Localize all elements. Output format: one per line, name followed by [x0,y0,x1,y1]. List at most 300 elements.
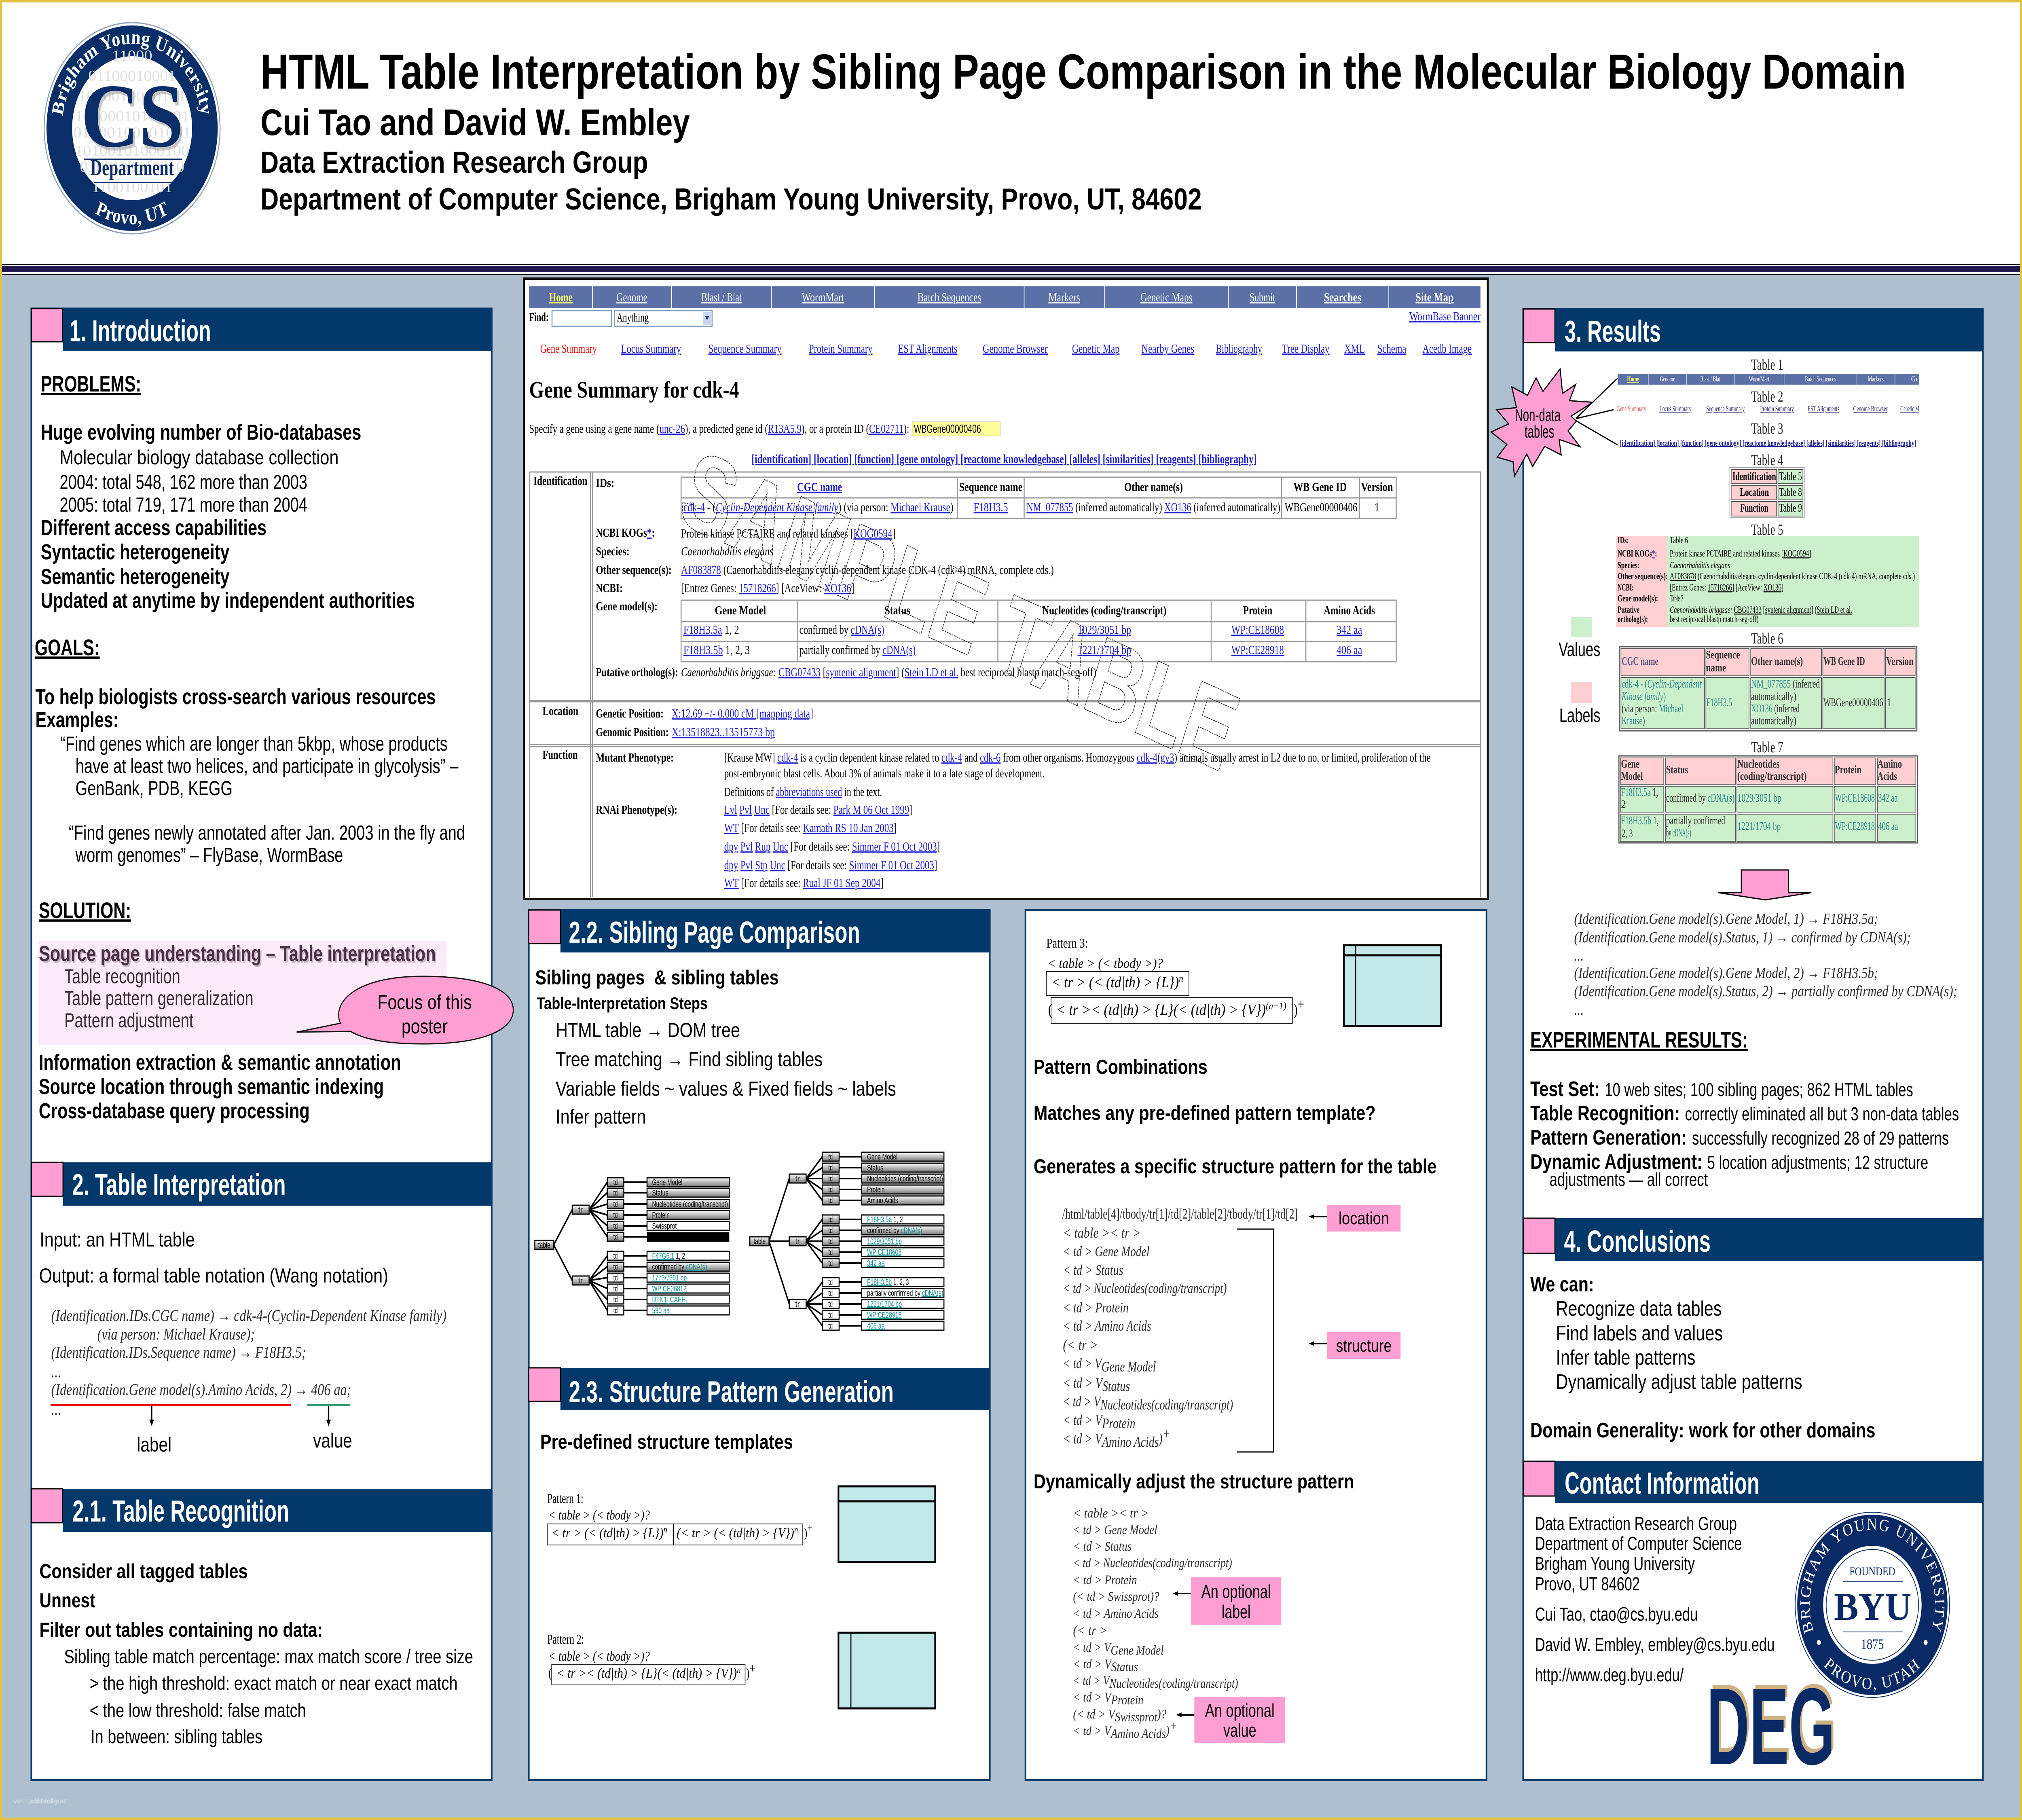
text block: table recognition: < the low threshold: false match [90,1700,306,1721]
structure pattern listing: < td > V [1063,1393,1105,1410]
text block: input and output: Output: a formal table notation (Wang notation) [39,1264,388,1287]
results: table 5: Table 5 [1751,521,1783,538]
pattern 3 [1047,935,1304,1024]
annotation: label and value arrows: value [313,1429,352,1452]
navigation bar: Searches [1324,291,1361,305]
results: table 5: Caenorhabditis briggsae: CBG07433 [syntenic alignment] (Stein LD et al. [1670,604,1852,615]
results: table 6: Other name(s) [1751,654,1803,668]
find controls: Find: [529,311,549,324]
identification row: AF083878 (Caenorhabditis elegans cyclin-dependent kinase CDK-4 (cdk-4) mRNA, complete cds.) [681,563,1054,577]
heading: 3. Results: 3. Results [1565,315,1661,348]
results: table 6: 1 [1887,696,1891,709]
structure pattern listing: Protein [1102,1415,1136,1432]
tab links: Gene Summary [540,342,597,356]
results: table 4: Table 4 [1751,451,1783,469]
gene model table: Nucleotides (coding/transcript) [1043,604,1166,618]
diagram: DOM tree of second sibling table: 406 aa [867,1321,885,1330]
results: table 5: Table 7 [1670,593,1684,603]
text block: contact details: Cui Tao, ctao@cs.byu.edu [1535,1604,1698,1625]
results: table 6: CGC name [1622,654,1658,668]
results: table 4: Table 5 [1779,470,1802,483]
heading: 2.3 Structure Pattern Generation [529,1368,990,1410]
diagram: DOM tree of second sibling table: td [828,1278,833,1287]
diagram: DOM tree of first sibling table: 1773/7391 bp [652,1273,687,1282]
pattern 1: n [663,1525,667,1534]
diagram: DOM tree of second sibling table: partially confirmed by cDNA(s) [867,1289,943,1297]
heading: Contact Information [1523,1461,1983,1503]
diagram: DOM tree of second sibling table: Protein [867,1185,885,1194]
text block: conclusions: Domain Generality: work for other domains [1530,1419,1876,1442]
results: table 7: by cDNA(s) [1666,826,1691,839]
results: table 2: Gene Summary [1617,404,1646,413]
results: table 6: cdk-4 - (Cyclin-Dependent [1622,677,1702,690]
callout: optional value: An optional [1205,1700,1275,1721]
function row: Function [543,748,577,762]
results: table 2: Table 2 [1751,388,1783,405]
results: table 4: Table 9 [1779,502,1802,514]
header band [0,0,2022,275]
results: table 7: 342 aa [1878,791,1898,804]
text block: experimental results: EXPERIMENTAL RESULTS: [1530,1027,1748,1052]
IDs table: Version [1361,480,1393,494]
diagram: DOM tree of first sibling table: Nucleotides (coding/transcript) [652,1200,728,1208]
text block: pattern combinations [1034,1055,1437,1178]
heading: 2. Table Interpretation: 2. Table Interpretation [72,1168,286,1202]
text block: conclusions: Recognize data tables [1556,1297,1722,1321]
structure pattern listing: < td > V [1063,1412,1105,1428]
gene model table: confirmed by cDNA(s) [799,623,884,637]
logo: BYU CS department seal: 01100010001 [88,67,176,85]
results: table 5: AF083878 (Caenorhabditis elegans cyclin-dependent kinase CDK-4 (cdk-4) mRNA, complete cds.) [1670,571,1915,581]
formula: results notation: (Identification.Gene model(s).Gene Model, 1) → F18H3.5a; [1574,910,1878,927]
text block: sibling pages: Table-Interpretation Steps [537,994,708,1013]
structure pattern listing: Nucleotides(coding/transcript) [1100,1397,1233,1413]
results: table 5: [Entrez Genes: 15718266] [AceView: XO136] [1670,582,1783,593]
results: table 1: Genome [1660,375,1675,383]
identification row: Caenorhabditis briggsae: CBG07433 [syntenic alignment] (Stein LD et al. best reciprocal blastp match-seg-off) [681,666,1096,679]
diagram: DOM tree of first sibling table: Swissprot [652,1221,677,1230]
navigation bar: Home [549,291,573,305]
text block: solution [38,897,446,1123]
highlight: source page understanding: Table recognition [64,965,180,988]
diagram: DOM tree of second sibling table: td [828,1299,833,1308]
location row: Location [543,705,578,718]
diagram: DOM tree of second sibling table: Status [867,1163,883,1172]
results: table 5: Other sequence(s): [1618,571,1668,581]
adjusted structure pattern listing: < td > Status [1073,1539,1132,1554]
diagram: DOM tree of second sibling table: td [828,1215,833,1224]
diagram: DOM tree of second sibling table: Gene Model [867,1152,897,1161]
text block: input and output [39,1228,388,1287]
results: table 7: F18H3.5b 1, [1621,814,1659,827]
text block: problems: Updated at anytime by independent authorities [41,588,415,613]
heading: 2.1 Table Recognition: 2.1. Table Recognition [72,1494,289,1528]
diagram: DOM tree of second sibling table: td [828,1310,833,1319]
affiliation: Department of Computer Science, Brigham Young University, Provo, UT, 84602 [260,182,1202,216]
callout: location [1309,1205,1400,1232]
callout: structure [1309,1332,1400,1359]
heading: 4. Conclusions [1523,1218,1983,1261]
gene model table: WP:CE28918 [1231,643,1284,657]
text block: pattern combinations: Matches any pre-defined pattern template? [1034,1101,1376,1124]
structure pattern listing: (< tr > [1063,1337,1098,1353]
gene model table: Gene Model [715,604,766,618]
function row: WT [For details see: Kamath RS 10 Jan 2003] [724,821,897,835]
callout: non-data tables starburst [1491,369,1618,476]
navigation bar [529,286,1481,308]
identification row: Putative ortholog(s): [596,666,678,679]
adjusted structure pattern listing: ) [1165,1723,1170,1738]
results: table 7 [1619,739,1918,843]
results: table 7: WP:CE18608 [1835,791,1875,804]
text block: solution: SOLUTION: [39,897,131,923]
pattern 3: < tr >< (td|th) > {L}(< (td|th) > {V}) [1056,1001,1250,1018]
diagram: DOM tree of first sibling table: tr [578,1276,583,1285]
diagram: DOM tree of second sibling table: Amino Acids [867,1196,898,1205]
pattern 1: < table > (< tbody >)? [548,1507,650,1523]
location row: Genomic Position: [596,726,668,739]
diagram: DOM tree of second sibling table: td [828,1174,833,1183]
pattern 2: ) [746,1666,750,1681]
navigation bar: Markers [1048,291,1080,305]
results: table 7: 2 [1621,798,1626,811]
logo: BYU CS department seal: 10100101000100 [75,142,189,159]
adjusted structure pattern listing: < td > Protein [1073,1572,1137,1587]
annotation: label and value arrows [51,1404,352,1456]
panel: results, conclusions and contact [1523,309,1983,1788]
highlight: source page understanding: Table pattern generalization [64,986,254,1009]
text block: conclusions: Find labels and values [1556,1322,1723,1345]
results: table 5: Gene model(s): [1618,593,1658,603]
results: table 1: WormMart [1749,375,1770,383]
results: table 5: Species: [1618,560,1639,570]
identification row: Gene model(s): [596,600,658,614]
structure pattern listing: Status [1102,1378,1130,1395]
text block: goals: “Find genes newly annotated after Jan. 2003 in the fly and [69,821,465,844]
results: table 7: Nucleotides [1737,757,1780,770]
pattern 1: + [807,1520,812,1536]
formula: Wang notation example: (Identification.Gene model(s).Amino Acids, 2) → 406 aa; [51,1380,351,1399]
diagram: DOM tree of second sibling table: td [828,1185,833,1194]
gene model table: Protein [1243,604,1272,618]
subheading: dynamically adjust: Dynamically adjust the structure pattern [1034,1470,1354,1493]
logo: BYU CS department seal: 11000 [112,47,152,64]
pattern 1: (< tr > (< (td|th) > {V}) [677,1525,789,1541]
callout: non-data tables starburst: Non-data [1515,405,1561,425]
subheading: predefined templates: Pre-defined structure templates [540,1430,793,1453]
structure pattern listing: Gene Model [1102,1359,1156,1375]
logo: BYU CS department seal: 10100010100101 [75,108,189,125]
text block: problems: Huge evolving number of Bio-databases [41,420,361,444]
logo: BYU seal: FOUNDED [1849,1564,1895,1578]
identification row: NCBI: [596,582,623,595]
diagram: DOM tree of second sibling table: F18H3.5a 1, 2 [867,1215,903,1224]
panel: pattern combinations and dynamic adjustment [1026,910,1487,1780]
text block: table recognition: Consider all tagged tables [40,1560,248,1583]
legend: values and labels: Labels [1559,705,1601,726]
pattern 3: ( [1048,1001,1052,1018]
gene model table: Status [885,604,910,618]
callout: optional label [1173,1577,1281,1625]
tab links: Nearby Genes [1142,342,1194,356]
diagram: DOM tree of second sibling table: tr [795,1299,800,1308]
heading: 2.1 Table Recognition [32,1489,492,1532]
diagram: DOM tree of first sibling table: td [613,1273,618,1282]
text block: conclusions: Dynamically adjust table patterns [1556,1370,1802,1394]
results: table 6: (via person: Michael [1622,702,1683,715]
results: table 2 [1617,388,1919,413]
pattern 2: Pattern 2: [547,1632,584,1647]
text block: table recognition: > the high threshold: exact match or near exact match [90,1673,458,1694]
pattern 3: (n−1) [1266,1000,1286,1011]
text block: goals: “Find genes which are longer than 5kbp, whose products [60,732,448,755]
logo: BYU CS department seal: 1010010010101 [78,87,186,105]
results: table 1: Markers [1868,375,1884,383]
navigation bar: WormMart [802,291,844,305]
text block: table recognition [40,1560,473,1748]
bracket: structure extent [1237,1229,1273,1452]
results: table 5: Caenorhabditis elegans [1670,560,1730,570]
adjusted structure pattern listing [1073,1506,1238,1741]
results: table 7: Model [1621,769,1643,783]
adjusted structure pattern listing: < td > V [1073,1657,1112,1672]
function row: dpy Pvl Rup Unc [For details see: Simmer F 01 Oct 2003] [724,840,940,854]
results: table 6 [1619,630,1917,731]
authors: Cui Tao and David W. Embley [260,101,690,143]
location row [543,705,813,739]
find controls [529,310,1481,326]
diagram: DOM tree of second sibling table: confirmed by cDNA(s) [867,1226,922,1235]
formula: results notation: ... [1574,947,1584,964]
tab links: XML [1344,342,1365,356]
adjusted structure pattern listing: (< td > V [1073,1707,1115,1722]
results: table 7: F18H3.5a 1, [1621,785,1658,799]
heading: 2.2 Sibling Page Comparison [529,910,990,952]
heading: Contact Information: Contact Information [1565,1467,1760,1500]
diagram: DOM tree of first sibling table: td [613,1232,618,1241]
identification row: Protein kinase PCTAIRE and related kinases [KOG0594] [681,527,895,541]
text block: conclusions: We can: [1530,1273,1594,1296]
results: table 6: XO136 (inferred [1751,702,1800,715]
text block: contact details: http://www.deg.byu.edu/ [1535,1665,1684,1685]
table sketch: label column pattern [838,1633,935,1708]
diagram: DOM tree of first sibling table: F47G6.1 1, 2 [652,1251,685,1260]
results: table 5: Putative [1618,604,1639,615]
pattern 2: n [737,1666,741,1675]
gene model table: partially confirmed by cDNA(s) [799,643,916,657]
diagram: DOM tree of first sibling table: 590 aa [652,1306,670,1315]
pattern 2: + [749,1661,755,1676]
adjusted structure pattern listing: Amino Acids [1110,1726,1166,1741]
IDs table: CGC name [797,480,842,494]
identification row: Other sequence(s): [596,563,672,577]
gene model table: WP:CE18608 [1231,623,1284,637]
text block: experimental results [1530,1027,1959,1190]
results: table 7: confirmed by cDNA(s) [1666,791,1734,804]
results: table 6: Table 6 [1751,630,1783,647]
highlight: source page understanding: Pattern adjustment [64,1009,193,1032]
logo: DEG: DEG [1709,1661,1837,1784]
diagram: DOM tree of second sibling table: 342 aa [867,1259,885,1268]
function row: Mutant Phenotype: [596,751,674,765]
pattern 2: ( [548,1666,552,1681]
results: table 1: Table 1 [1751,356,1783,373]
gene model table: 1221/1704 bp [1078,643,1131,657]
text block: goals: To help biologists cross-search various resources [36,684,436,709]
text block: goals: have at least two helices, and participate in glycolysis” – [76,754,459,777]
text block: sibling pages: Variable fields ~ values & Fixed fields ~ labels [556,1077,896,1100]
results: table 7: partially confirmed [1666,814,1725,827]
diagram: DOM tree of second sibling table: F18H3.5b 1, 2, 3 [867,1278,909,1287]
tab links [540,342,1472,356]
logo: BYU CS department seal: 01000100101001 [73,124,191,141]
results: table 6: WBGene00000406 [1823,696,1883,709]
text block: contact details: Brigham Young University [1535,1553,1695,1574]
navigation bar: Genetic Maps [1140,291,1192,305]
text block: table recognition: Filter out tables containing no data: [40,1618,323,1641]
text block: problems: Molecular biology database collection [60,446,339,469]
formula: Wang notation example: (Identification.IDs.CGC name) → cdk-4-(Cyclin-Dependent Kinase family) [51,1306,446,1325]
text block: contact details [1535,1513,1775,1685]
callout: optional label: label [1222,1602,1251,1622]
diagram: DOM tree of second sibling table: td [828,1226,833,1235]
function row: RNAi Phenotype(s): [596,803,677,817]
results: table 7: 406 aa [1878,819,1898,833]
diagram: DOM tree of first sibling table: td [613,1200,618,1208]
diagram: DOM tree of first sibling table: DTN1_CAEEL [652,1295,689,1304]
text block: input and output: Input: an HTML table [40,1228,195,1251]
results: table 7: Protein [1835,763,1861,776]
IDs table: Other name(s) [1124,480,1183,494]
diagram: DOM tree of first sibling table: td [613,1251,618,1260]
find controls: WormBase Banner [1409,310,1481,324]
structure pattern listing: + [1163,1426,1170,1442]
heading: 4. Conclusions: 4. Conclusions [1564,1225,1711,1258]
structure pattern listing: < td > V [1063,1375,1105,1391]
heading: 2.2 Sibling Page Comparison: 2.2. Sibling Page Comparison [569,916,860,949]
adjusted structure pattern listing: < td > Gene Model [1073,1522,1157,1537]
pattern 2 [547,1632,755,1685]
results: table 5 [1616,521,1919,627]
callout: focus of this poster [296,976,513,1044]
tab links: Protein Summary [809,342,873,356]
logo: BYU seal: 1875 [1861,1636,1884,1653]
arrow: table to notation [1718,870,1811,900]
text block: pattern combinations: Generates a specific structure pattern for the table [1034,1155,1437,1178]
pattern 3: Pattern 3: [1047,935,1088,951]
logo: BYU seal: BYU [1834,1585,1912,1629]
callout: focus of this poster: poster [402,1015,448,1038]
structure pattern listing: < td > Gene Model [1063,1243,1150,1260]
callout: location: location [1339,1208,1389,1228]
results: table 7: WP:CE28918 [1835,819,1875,833]
results: table 7: Acids [1878,769,1897,783]
gene specification line: WBGene00000406 [914,422,981,436]
structure pattern listing: ) [1158,1431,1163,1447]
title: HTML Table Interpretation by Sibling Page Comparison in the Molecular Biology Domain [260,44,1906,99]
adjusted structure pattern listing: Gene Model [1110,1643,1164,1658]
results: table 1: Blast / Blat [1701,375,1720,383]
results: table 5: ortholog(s): [1618,614,1648,624]
panel: sample gene summary screenshot [524,279,1488,899]
logo: BYU seal: PROVO, UTAH [1821,1655,1923,1693]
screenshot heading: Gene Summary for cdk-4 [529,377,739,403]
function row: post-embryonic blast cells. About 3% of animals make it to a late stage of development. [724,767,1045,781]
location row: X:12.69 +/- 0.000 cM [mapping data] [672,707,813,721]
table sketch: header row pattern [838,1486,935,1562]
logo: BYU seal: BRIGHAM YOUNG UNIVERSITY [1798,1515,1947,1636]
results: table 2: Genome Browser [1853,404,1888,413]
results: table 2: Protein Summary [1760,404,1794,413]
title block [260,44,1906,216]
diagram: DOM tree of first sibling table: td [613,1188,618,1197]
structure pattern listing: < td > Amino Acids [1063,1318,1151,1334]
logo: BYU CS department seal: 0100100010010 [80,158,184,176]
tab links: Tree Display [1282,342,1330,356]
text block: contact details: Data Extraction Research Group [1535,1513,1737,1534]
results: table 4: Table 8 [1779,486,1802,499]
results: table 5: Protein kinase PCTAIRE and related kinases [KOG0594] [1670,548,1811,559]
results: table 3: [identification] [location] [function] [gene ontology] [reactome knowledgebase] [alleles] [similarities] [reagents] [bibliography] [1620,439,1916,447]
diagram: DOM tree of first sibling table: td [613,1295,618,1304]
text block: problems: 2004: total 548, 162 more than 2003 [60,470,307,493]
gene specification line: Specify a gene using a gene name (unc-26), a predicted gene id (R13A5.9), or a protein ID (CE02711): [529,422,909,436]
tab links: Genome Browser [983,342,1048,356]
text block: solution: Source location through semantic indexing [39,1074,384,1099]
heading: 3. Results [1523,309,1983,351]
diagram: DOM tree of second sibling table: WP:CE18608 [867,1248,901,1257]
IDs table: cdk-4 - (Cyclin-Dependent Kinase family) (via person: Michael Krause) [683,501,954,514]
text block: sibling pages: Infer pattern [556,1105,646,1128]
text block: problems: Different access capabilities [41,515,266,540]
identification row: Identification [533,474,588,488]
results: table 4: Identification [1732,470,1776,483]
footer credit: www.imagechristiancollege.com [13,1797,68,1805]
pattern 2: < tr >< (td|th) > {L}(< (td|th) > {V}) [556,1666,730,1681]
callout: structure: structure [1336,1335,1392,1356]
pattern 3: < tr > (< (td|th) > {L}) [1051,973,1172,991]
annotation: label and value arrows: label [137,1433,171,1456]
identification row: IDs: [596,476,614,490]
structure pattern listing: < td > Status [1063,1262,1123,1278]
results: table 6: Kinase family) [1621,690,1666,703]
diagram: DOM tree of first sibling table: td [613,1306,618,1315]
text block: solution: Cross-database query processing [39,1098,310,1123]
logo: BYU CS department seal: Department [90,155,174,180]
logo: BYU CS department seal [44,23,220,234]
structure pattern listing: < td > Protein [1063,1299,1129,1316]
adjusted structure pattern listing: < td > Nucleotides(coding/transcript) [1073,1555,1232,1570]
text block: problems: Syntactic heterogeneity [41,540,230,564]
formula: results notation: (Identification.Gene model(s).Gene Model, 2) → F18H3.5b; [1574,964,1878,982]
results: table 1 [1618,356,1919,385]
diagram: DOM tree of first sibling table: table [538,1240,550,1249]
adjusted structure pattern listing: Protein [1111,1693,1143,1708]
pattern 1: < tr > (< (td|th) > {L}) [551,1525,659,1541]
text block: problems: Semantic heterogeneity [41,564,230,589]
tab links: Genetic Map [1072,342,1119,356]
tab links: Acedb Image [1423,342,1472,356]
navigation bar: Blast / Blat [701,291,742,305]
text block: pattern combinations: Pattern Combinations [1034,1055,1208,1078]
results: table 2: Genetic M [1900,404,1919,413]
text block: experimental results: adjustments — all correct [1550,1169,1708,1190]
text block: experimental results: correctly eliminated all but 3 non-data tables [1685,1104,1959,1124]
diagram: DOM tree of first sibling table: Gene Model [652,1178,683,1187]
adjusted structure pattern listing: < td > V [1073,1690,1112,1705]
diagram: DOM tree of second sibling table: td [828,1163,833,1172]
pattern 3: + [1298,995,1304,1013]
